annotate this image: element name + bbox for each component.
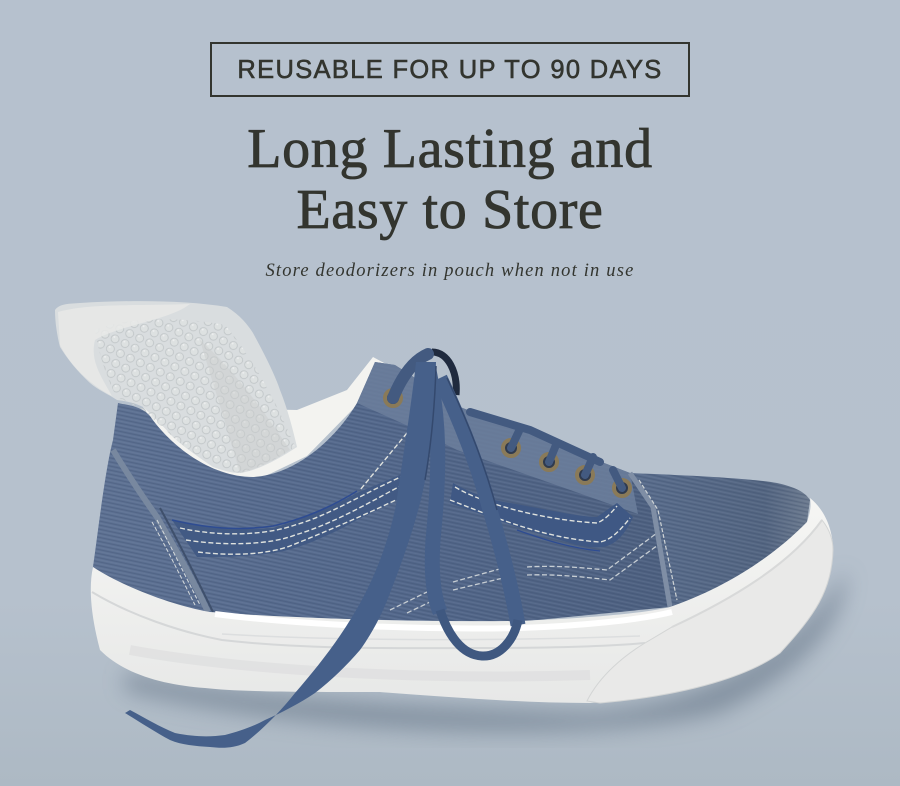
eyelet laces — [393, 354, 622, 488]
toe seam — [630, 473, 670, 607]
laces — [125, 362, 518, 748]
eyestay panel — [357, 362, 638, 514]
ground shadow — [125, 570, 846, 731]
badge: reusable duration — [210, 42, 690, 97]
title: Long Lasting and — [247, 118, 653, 180]
badge: reusable duration: REUSABLE FOR UP TO 90 DAYS — [237, 56, 663, 84]
lace: long end with tip — [125, 362, 436, 748]
deodorizer pouch — [55, 301, 297, 473]
title — [247, 118, 653, 241]
shoe lining — [143, 357, 386, 482]
toe cap — [630, 473, 810, 607]
toe bumper — [587, 520, 833, 703]
lower stitching — [390, 533, 658, 613]
sole — [91, 498, 833, 703]
heel seam — [113, 450, 208, 612]
front side stripe — [450, 483, 633, 547]
rear side stripe — [172, 472, 407, 557]
back lace loop — [432, 352, 456, 395]
shoe upper — [93, 362, 810, 622]
subtitle: Store deodorizers in pouch when not in use — [265, 261, 634, 281]
title: Easy to Store — [296, 179, 604, 241]
eyelets — [385, 390, 630, 496]
lace: inner loop — [428, 366, 440, 612]
